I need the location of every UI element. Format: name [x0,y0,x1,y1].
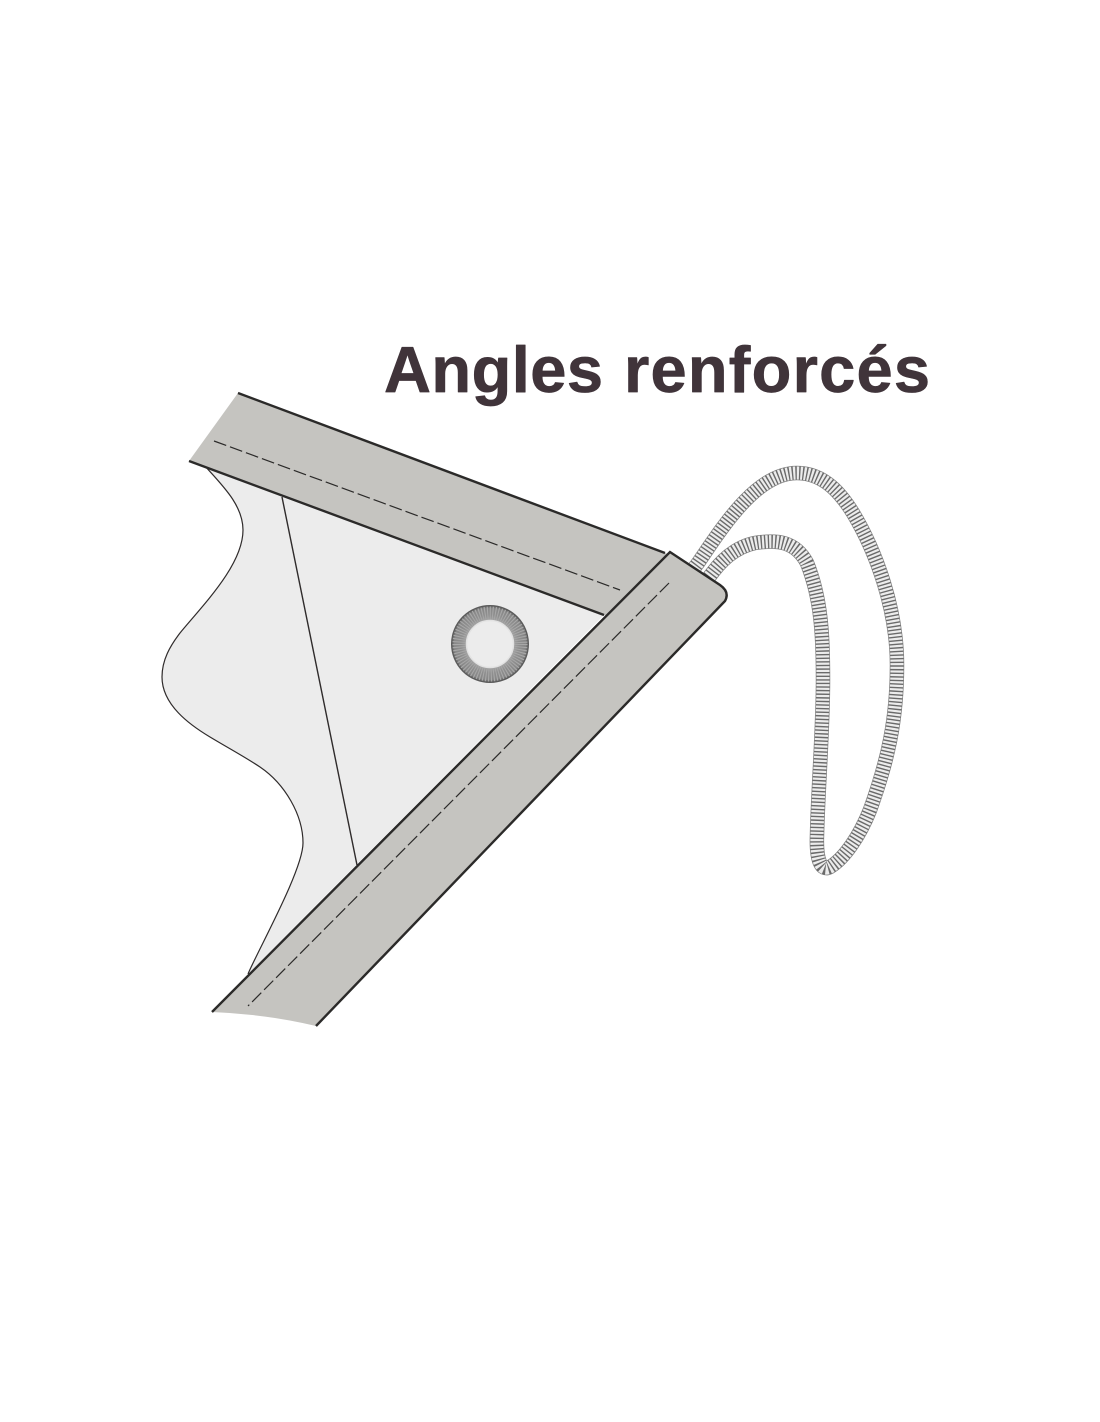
diagonal hem stitching [248,583,669,1006]
diagonal hem band [212,552,727,1026]
top hem stitching [214,441,620,590]
rope loop [685,473,897,868]
fold line [282,497,357,865]
fabric sheet [162,465,604,974]
title: renforcés [624,333,930,406]
eyelet grommet [452,606,528,682]
top hem band [189,393,668,617]
title: Angles [384,333,603,406]
fabric wavy outline [162,465,303,974]
